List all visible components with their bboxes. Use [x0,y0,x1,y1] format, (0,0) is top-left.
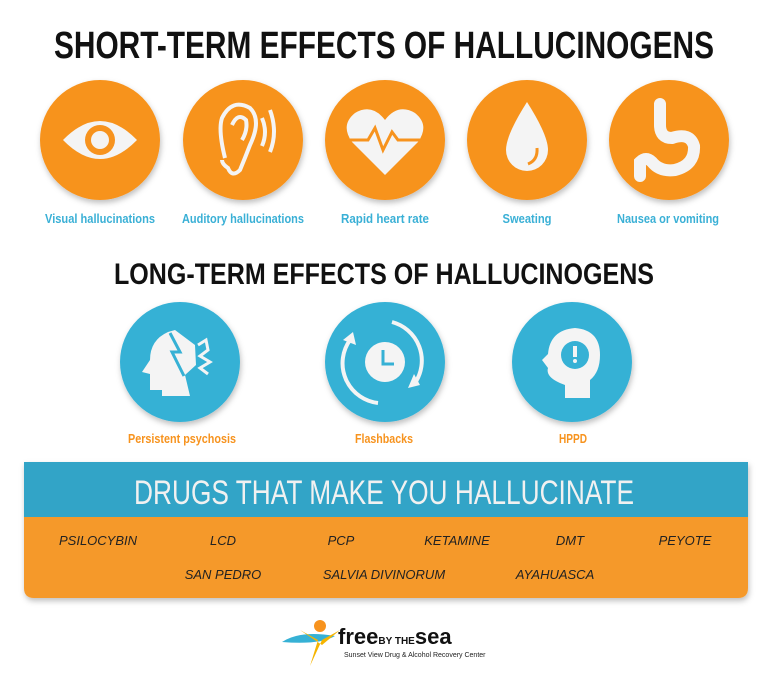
icon: persistent psychosis: Persistent psychosis [128,431,236,446]
drug list: DMT [556,533,585,548]
drug list: PSILOCYBIN [59,533,138,548]
icon: sweating: Sweating [502,211,552,226]
icon: HPPD: HPPD [559,431,587,446]
icon: visual hallucinations [40,80,160,226]
drug list: SALVIA DIVINORUM [323,567,445,582]
banner heading: DRUGS THAT MAKE YOU HALLUCINATE [134,474,634,512]
icon: flashbacks [325,302,445,446]
drug list: PEYOTE [659,533,712,548]
icon: auditory hallucinations [182,80,304,226]
drug list: LCD [210,533,236,548]
icon: auditory hallucinations: Auditory hallucinations [182,211,304,226]
drug list [59,533,712,582]
drug list: AYAHUASCA [515,567,594,582]
drug list: SAN PEDRO [185,567,261,582]
panel: drugs banner [24,462,748,598]
icon: visual hallucinations: Visual hallucinations [45,211,155,226]
logo: Sunset View Drug & Alcohol Recovery Center [344,652,486,659]
drug list: KETAMINE [424,533,490,548]
logo [282,620,486,666]
icon: HPPD [512,302,632,446]
icon: nausea: Nausea or vomiting [617,211,719,226]
icon: nausea [609,80,729,226]
icon: flashbacks: Flashbacks [355,431,413,446]
icon: sweating [467,80,587,226]
icon: rapid heart rate: Rapid heart rate [341,211,429,226]
logo: freeBY THEsea [338,624,452,649]
icon: persistent psychosis [120,302,240,446]
title: long-term: LONG-TERM EFFECTS OF HALLUCINOGENS [114,258,654,291]
drug list: PCP [328,533,355,548]
icon: rapid heart rate [325,80,445,226]
